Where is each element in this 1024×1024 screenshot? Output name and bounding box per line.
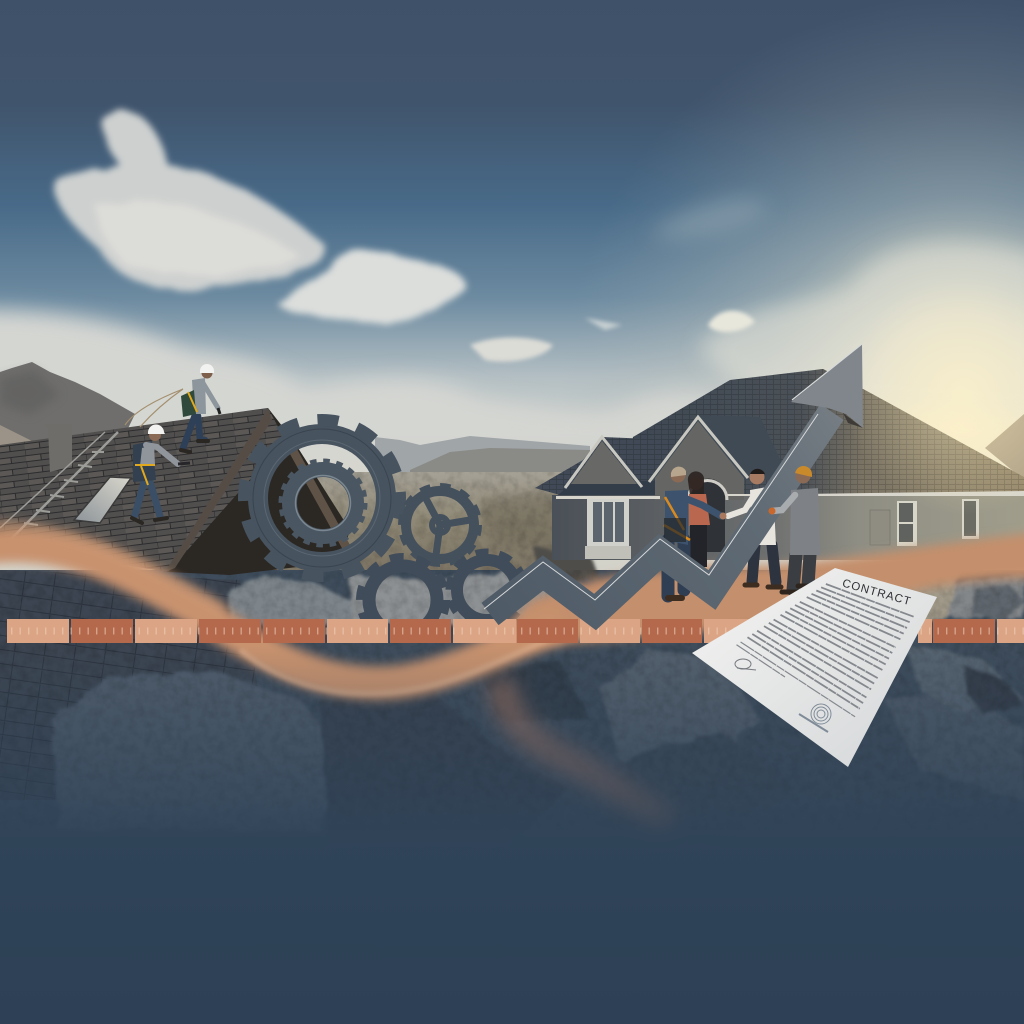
- paper: [692, 568, 937, 767]
- cloud left large: [55, 111, 325, 289]
- horizon cloud bank: [0, 310, 720, 450]
- roofer holding arrow: [768, 466, 820, 592]
- shingled roof: [0, 408, 285, 572]
- contract title: CONTRACT: [841, 578, 913, 608]
- sand ground swoosh: [0, 525, 1024, 825]
- safety rope: [125, 389, 183, 427]
- arrow head: [791, 344, 863, 428]
- signature: [735, 659, 756, 670]
- lower gear right: [449, 552, 525, 628]
- gears: [244, 420, 525, 643]
- ruler segments: [7, 619, 1024, 643]
- window right 1: [897, 501, 917, 546]
- people at the house: [664, 467, 781, 598]
- worker on roof, upper: [181, 364, 220, 452]
- chimney: [45, 424, 72, 472]
- lower dark porch roof: [558, 481, 668, 495]
- worker in harness shaking hands: [664, 467, 726, 598]
- clouds: [0, 111, 1024, 450]
- centre gable roof: [650, 415, 790, 480]
- window left: [585, 499, 631, 559]
- sun flare over house: [840, 275, 1024, 515]
- fascia: [556, 491, 1024, 499]
- contract body lines: [736, 584, 914, 717]
- walls: [552, 495, 1024, 560]
- inner gear: [282, 462, 364, 544]
- man in white shirt: [728, 469, 781, 587]
- worker on roof, lower: [132, 424, 190, 523]
- roof gable interior: [168, 408, 350, 575]
- rocks ground: [0, 548, 1024, 1024]
- window right 2: [962, 499, 979, 539]
- lower gear left: [360, 557, 446, 643]
- roof beam: [285, 440, 350, 550]
- contract document: [692, 568, 937, 767]
- left wing roof: [535, 437, 675, 495]
- bottom navy fade: [0, 645, 1024, 1024]
- roof edge: [165, 408, 272, 572]
- distant mountains and valley: [0, 362, 1024, 572]
- wall panel: [870, 510, 890, 545]
- large gear: [244, 420, 400, 576]
- front door: [692, 478, 725, 552]
- main roof: [620, 369, 1024, 494]
- house: [535, 369, 1024, 560]
- centre gable: [649, 417, 748, 500]
- skylight: [74, 477, 131, 523]
- left roof with workers: [0, 364, 350, 575]
- cloud middle: [278, 250, 466, 324]
- ruler ticks: [11, 628, 1024, 634]
- seal: [799, 704, 831, 732]
- growth arrow: [484, 344, 863, 614]
- homeowner woman: [688, 471, 710, 567]
- left gable: [565, 437, 642, 488]
- ladder: [0, 432, 118, 545]
- ruler: [7, 619, 1024, 643]
- spoked gear: [401, 486, 479, 564]
